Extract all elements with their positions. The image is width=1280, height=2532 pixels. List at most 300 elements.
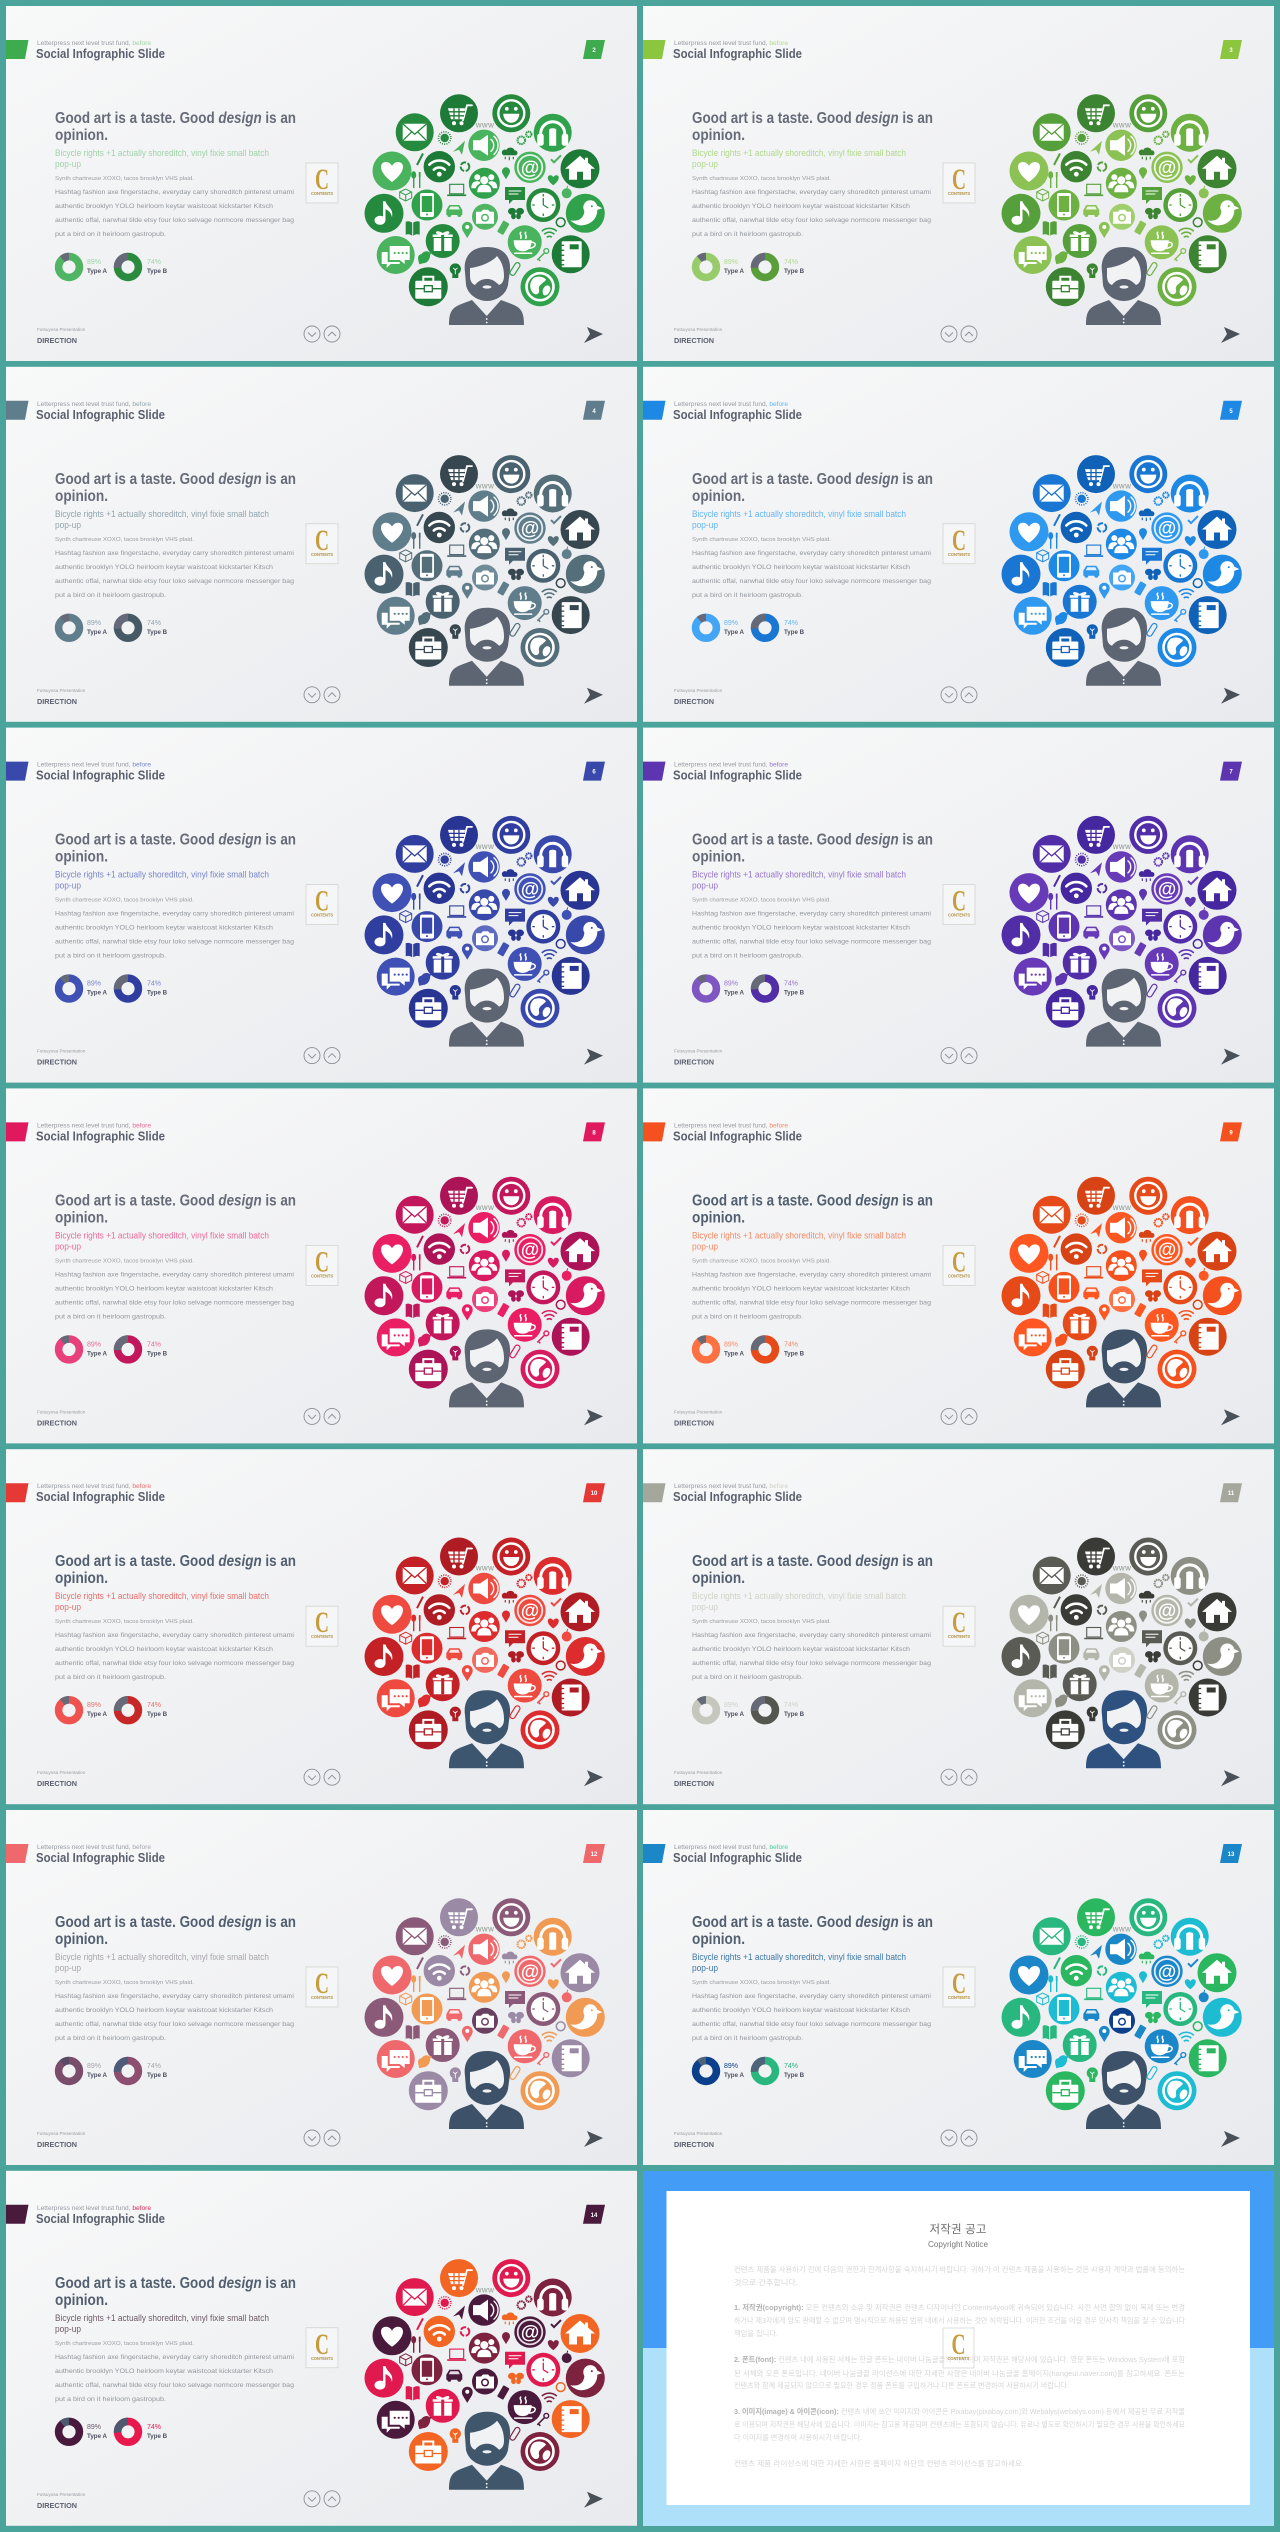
footer: DIRECTION xyxy=(674,336,714,345)
logo: C xyxy=(315,2328,329,2361)
donut B xyxy=(754,2060,776,2082)
footer xyxy=(37,1409,86,1427)
person silhouette xyxy=(449,247,524,325)
body text: authentic brooklyn YOLO heirloom keytar waistcoat kickstarter Kitsch xyxy=(692,2007,910,2014)
title tab xyxy=(643,1844,666,1863)
donut A label xyxy=(724,1341,744,1357)
icon: battery xyxy=(497,220,510,235)
footer: Futsuyosa Presentation xyxy=(674,1049,723,1054)
subheading: Bicycle rights +1 actually shoreditch, vinyl fixie small batch xyxy=(55,1230,269,1240)
icon: bulb xyxy=(450,263,461,278)
slide title: Social Infographic Slide xyxy=(36,1851,165,1865)
subheading: Bicycle rights +1 actually shoreditch, vinyl fixie small batch xyxy=(55,870,269,880)
copyright body: 책임을 집니다. xyxy=(734,2329,778,2338)
logo: C xyxy=(315,1606,329,1639)
headline line 2: opinion. xyxy=(692,849,745,866)
donut A label xyxy=(724,620,744,636)
subheading line 2: pop-up xyxy=(692,1963,718,1973)
donut B label: Type B xyxy=(784,1350,804,1357)
icon: wifi xyxy=(424,151,455,182)
headline line 2: opinion. xyxy=(55,1570,108,1587)
slide 9: orange xyxy=(643,1088,1274,1443)
donut A label: Type A xyxy=(87,2072,107,2079)
donut A label: 89% xyxy=(87,981,101,988)
page number tab xyxy=(1220,1483,1242,1502)
donut B xyxy=(117,617,139,639)
slide 7: purple xyxy=(643,728,1274,1083)
donut A label: 89% xyxy=(724,259,738,266)
small note: Synth chartreuse XOXO, tacos brooklyn VHS plaid. xyxy=(55,898,194,904)
icon: bird badge xyxy=(566,194,605,233)
donut A label: Type A xyxy=(724,268,744,275)
slide 5: blue xyxy=(643,367,1274,722)
icon: speech bubble xyxy=(505,187,525,204)
body text: put a bird on it heirloom gastropub. xyxy=(692,231,803,238)
footer: Futsuyosa Presentation xyxy=(674,688,723,693)
body text: authentic offal, narwhal tilde etsy four loko selvage normcore messenger bag xyxy=(55,1660,294,1667)
header subtitle: Letterpress next level trust fund, before xyxy=(674,762,788,769)
logo: CONTENTS xyxy=(311,552,333,557)
page number tab xyxy=(583,40,605,59)
footer: Futsuyosa Presentation xyxy=(37,2492,86,2497)
icon: briefcase xyxy=(409,267,448,306)
send arrow icon xyxy=(1221,1770,1240,1786)
donut A label: Type A xyxy=(87,990,107,997)
body text: authentic brooklyn YOLO heirloom keytar waistcoat kickstarter Kitsch xyxy=(692,1285,910,1292)
slide title: Social Infographic Slide xyxy=(36,408,165,422)
www label: www xyxy=(475,120,494,130)
slide title: Social Infographic Slide xyxy=(673,47,802,61)
footer: Futsuyosa Presentation xyxy=(37,1409,86,1414)
page number tab xyxy=(1220,40,1242,59)
logo: C xyxy=(952,1606,966,1639)
title tab xyxy=(6,401,28,420)
send arrow icon xyxy=(584,1409,603,1425)
subheading line 2: pop-up xyxy=(55,159,81,169)
icon: apple xyxy=(562,186,572,198)
donut A xyxy=(54,2417,84,2446)
donut B label: 74% xyxy=(784,259,798,266)
body text xyxy=(55,2354,294,2403)
logo: C xyxy=(952,2328,966,2361)
logo: CONTENTS xyxy=(311,1634,333,1639)
donut A label: Type A xyxy=(87,1350,107,1357)
slide title: Social Infographic Slide xyxy=(673,1490,802,1504)
body text: authentic offal, narwhal tilde etsy four loko selvage normcore messenger bag xyxy=(692,217,931,224)
subheading: Bicycle rights +1 actually shoreditch, vinyl fixie small batch xyxy=(692,1230,906,1240)
headline line 2: opinion. xyxy=(55,849,108,866)
page number tab xyxy=(583,1122,605,1141)
donut A xyxy=(54,252,84,282)
icon: gift xyxy=(426,224,460,258)
donut B label: Type B xyxy=(147,1350,167,1357)
logo: C xyxy=(952,163,966,196)
nav buttons xyxy=(941,1769,977,1785)
donut A label: Type A xyxy=(724,1711,744,1718)
body text: put a bird on it heirloom gastropub. xyxy=(692,2035,803,2042)
small note: Synth chartreuse XOXO, tacos brooklyn VHS plaid. xyxy=(55,1619,194,1625)
donut B label: 74% xyxy=(147,259,161,266)
copyright body: 다 이미지를 변경하여 사용하시기 바랍니다. xyxy=(734,2433,862,2442)
body text xyxy=(55,1632,294,1681)
slide title: Social Infographic Slide xyxy=(673,769,802,783)
donut A label xyxy=(724,1702,744,1718)
slide 10: red xyxy=(6,1449,637,1804)
slide 12: muted multicolour xyxy=(6,1810,637,2165)
donut A label: 89% xyxy=(87,1341,101,1348)
headline: Good art is a taste. Good design is an xyxy=(692,832,933,849)
footer: DIRECTION xyxy=(674,1418,714,1427)
slide 14: plum and orange xyxy=(6,2171,637,2526)
icon: butterfly xyxy=(508,208,524,219)
logo xyxy=(306,163,338,203)
slide title: Social Infographic Slide xyxy=(673,1851,802,1865)
icon cluster xyxy=(1002,94,1242,325)
header subtitle: Letterpress next level trust fund, before xyxy=(674,401,788,408)
body text xyxy=(692,550,931,599)
donut B label: 74% xyxy=(784,2063,798,2070)
nav buttons xyxy=(304,326,340,342)
logo xyxy=(306,1245,338,1285)
footer: Futsuyosa Presentation xyxy=(37,327,86,332)
title tab xyxy=(6,1483,28,1502)
subheading: Bicycle rights +1 actually shoreditch, vinyl fixie small batch xyxy=(55,1952,269,1962)
slide title: Social Infographic Slide xyxy=(673,1129,802,1143)
send arrow icon xyxy=(1221,327,1240,343)
body text xyxy=(692,1993,931,2042)
body text xyxy=(55,1993,294,2042)
copyright title: 저작권 공고 xyxy=(930,2223,986,2236)
donut A xyxy=(691,2056,721,2086)
small note: Synth chartreuse XOXO, tacos brooklyn VHS plaid. xyxy=(692,1619,831,1625)
title tab xyxy=(643,401,666,420)
page number: 7 xyxy=(1229,770,1233,776)
donut B label: Type B xyxy=(784,990,804,997)
subheading: Bicycle rights +1 actually shoreditch, vinyl fixie small batch xyxy=(55,1591,269,1601)
body text: authentic brooklyn YOLO heirloom keytar waistcoat kickstarter Kitsch xyxy=(692,1646,910,1653)
title tab xyxy=(643,1483,666,1502)
headline line 2: opinion. xyxy=(55,488,108,505)
body text: authentic brooklyn YOLO heirloom keytar waistcoat kickstarter Kitsch xyxy=(692,564,910,571)
donut B label xyxy=(784,981,804,997)
body text: authentic offal, narwhal tilde etsy four loko selvage normcore messenger bag xyxy=(55,939,294,946)
donut B label xyxy=(147,2063,167,2079)
logo: CONTENTS xyxy=(948,191,970,196)
body text: put a bird on it heirloom gastropub. xyxy=(55,2035,166,2042)
donut A label xyxy=(87,2063,107,2079)
donut B xyxy=(117,2060,139,2082)
body text: Hashtag fashion axe fingerstache, everyday carry shoreditch pinterest umami xyxy=(692,1271,931,1278)
body text: put a bird on it heirloom gastropub. xyxy=(55,1674,166,1681)
logo: C xyxy=(315,163,329,196)
body text: put a bird on it heirloom gastropub. xyxy=(692,592,803,599)
donut A xyxy=(691,1696,721,1725)
header subtitle: Letterpress next level trust fund, before xyxy=(37,1483,151,1490)
headline: Good art is a taste. Good design is an xyxy=(55,1192,296,1209)
icon: smile xyxy=(492,94,530,132)
headline line 2: opinion. xyxy=(55,1931,108,1948)
header subtitle: Letterpress next level trust fund, before xyxy=(37,401,151,408)
title tab xyxy=(643,1122,666,1141)
body text: authentic brooklyn YOLO heirloom keytar waistcoat kickstarter Kitsch xyxy=(55,2007,273,2014)
slide 8: pink xyxy=(6,1088,637,1443)
headline line 2: opinion. xyxy=(692,1931,745,1948)
headline: Good art is a taste. Good design is an xyxy=(55,832,296,849)
slide 4: slate xyxy=(6,367,637,722)
nav buttons xyxy=(941,2130,977,2146)
donut A xyxy=(54,974,84,1003)
footer xyxy=(37,1049,86,1067)
icon cluster xyxy=(1002,816,1242,1047)
headline line 2: opinion. xyxy=(692,1570,745,1587)
body text xyxy=(55,1271,294,1320)
donut A xyxy=(54,1696,84,1725)
page number: 2 xyxy=(592,48,596,54)
body text: put a bird on it heirloom gastropub. xyxy=(55,231,166,238)
slide title: Social Infographic Slide xyxy=(36,1490,165,1504)
footer: DIRECTION xyxy=(674,697,714,706)
icon: camera xyxy=(472,204,498,230)
donut A label xyxy=(87,981,107,997)
icon: speaker xyxy=(468,130,500,161)
copyright subtitle: Copyright Notice xyxy=(928,2240,989,2249)
icon: at sign: @ xyxy=(521,158,539,179)
donut B label xyxy=(784,1341,804,1357)
page number: 3 xyxy=(1229,48,1233,54)
donut B label: Type B xyxy=(784,1711,804,1718)
subheading: Bicycle rights +1 actually shoreditch, vinyl fixie small batch xyxy=(55,509,269,519)
donut A label xyxy=(87,259,107,275)
logo: CONTENTS xyxy=(311,1273,333,1278)
footer: Futsuyosa Presentation xyxy=(674,1409,723,1414)
page number: 6 xyxy=(592,770,596,776)
logo: C xyxy=(952,1967,966,2000)
body text xyxy=(692,911,931,960)
icon: notebook xyxy=(552,235,590,273)
logo: C xyxy=(315,1245,329,1278)
nav buttons xyxy=(304,2491,340,2507)
send arrow icon xyxy=(584,2131,603,2147)
logo xyxy=(306,524,338,564)
logo xyxy=(306,2328,338,2368)
icon: gears xyxy=(518,132,532,144)
icon cluster xyxy=(364,1538,605,1768)
donut B label xyxy=(784,259,804,275)
donut B label: Type B xyxy=(784,2072,804,2079)
icon: refresh xyxy=(461,162,469,171)
icon: small heart xyxy=(548,175,559,185)
icon cluster xyxy=(1002,455,1242,686)
donut A label xyxy=(87,1341,107,1357)
slide title: Social Infographic Slide xyxy=(36,769,165,783)
body text: authentic offal, narwhal tilde etsy four loko selvage normcore messenger bag xyxy=(692,1299,931,1306)
body text: Hashtag fashion axe fingerstache, everyday carry shoreditch pinterest umami xyxy=(692,1993,931,2000)
body text: authentic offal, narwhal tilde etsy four loko selvage normcore messenger bag xyxy=(692,939,931,946)
donut A label xyxy=(724,2063,744,2079)
donut A label: Type A xyxy=(724,2072,744,2079)
logo: C xyxy=(952,524,966,557)
subheading line 2: pop-up xyxy=(692,159,718,169)
donut B label: Type B xyxy=(784,629,804,636)
headline line 2: opinion. xyxy=(692,488,745,505)
icon: small wifi xyxy=(542,228,557,237)
donut B label: 74% xyxy=(147,981,161,988)
donut B label: 74% xyxy=(784,981,798,988)
send arrow icon xyxy=(584,2492,603,2508)
icon: pencil xyxy=(417,154,423,165)
donut B xyxy=(117,256,139,278)
icon: book xyxy=(406,221,420,236)
icon: laptop xyxy=(447,184,466,195)
body text: authentic brooklyn YOLO heirloom keytar waistcoat kickstarter Kitsch xyxy=(55,564,273,571)
logo: CONTENTS xyxy=(948,1273,970,1278)
headline: Good art is a taste. Good design is an xyxy=(55,2275,296,2292)
donut B label: 74% xyxy=(147,2063,161,2070)
subheading: Bicycle rights +1 actually shoreditch, vinyl fixie small batch xyxy=(692,1952,906,1962)
donut B label: Type B xyxy=(147,268,167,275)
body text: Hashtag fashion axe fingerstache, everyday carry shoreditch pinterest umami xyxy=(692,189,931,196)
nav buttons xyxy=(941,1048,977,1064)
footer xyxy=(37,327,86,345)
icon cluster xyxy=(364,1177,605,1407)
footer: Futsuyosa Presentation xyxy=(674,2131,723,2136)
small note: Synth chartreuse XOXO, tacos brooklyn VHS plaid. xyxy=(55,1258,194,1264)
icon: home xyxy=(560,149,600,188)
footer: DIRECTION xyxy=(674,2140,714,2149)
nav buttons xyxy=(304,1769,340,1785)
slide title: Social Infographic Slide xyxy=(36,47,165,61)
icon cluster xyxy=(364,455,605,686)
icon: box xyxy=(400,189,412,201)
footer: DIRECTION xyxy=(37,1058,77,1067)
copyright notice panel xyxy=(643,2171,1274,2526)
copyright body: 로 이용되며 저작권은 해당사에 있습니다. 이미지는 참고용 제공되며 컨텐츠에는 포함되지 않습니다. 유료나 별도로 확인하시기 필요한 경우 사용을 확인하세요 xyxy=(734,2420,1185,2429)
body text: authentic brooklyn YOLO heirloom keytar waistcoat kickstarter Kitsch xyxy=(692,925,910,932)
title tab xyxy=(6,1122,28,1141)
body text xyxy=(692,1271,931,1320)
donut B xyxy=(754,977,776,1000)
send arrow icon xyxy=(1221,1049,1240,1065)
icon: cup xyxy=(508,225,542,259)
page number tab xyxy=(583,1844,605,1863)
headline line 2: opinion. xyxy=(692,1209,745,1226)
logo: CONTENTS xyxy=(311,1995,333,2000)
donut B xyxy=(117,977,139,1000)
donut B label: 74% xyxy=(147,620,161,627)
donut A label: Type A xyxy=(87,1711,107,1718)
copyright body: 1. 저작권(copyright): 모든 컨텐츠의 소유 및 저작권은 컨텐츠 디자이너인 Contents4you에 귀속되어 있습니다. 사전 서면 합의 없이 복제 또는 변경 xyxy=(734,2303,1185,2312)
body text: Hashtag fashion axe fingerstache, everyday carry shoreditch pinterest umami xyxy=(55,1632,294,1639)
donut B label: 74% xyxy=(784,1341,798,1348)
headline: Good art is a taste. Good design is an xyxy=(692,1914,933,1931)
icon cluster xyxy=(364,816,605,1047)
donut B label xyxy=(784,2063,804,2079)
body text: authentic offal, narwhal tilde etsy four loko selvage normcore messenger bag xyxy=(692,2021,931,2028)
title tab xyxy=(6,1844,28,1863)
footer: Futsuyosa Presentation xyxy=(37,1770,86,1775)
icon cluster xyxy=(1002,1538,1242,1768)
body text xyxy=(55,189,294,238)
donut A label: 89% xyxy=(87,2424,101,2431)
donut A label: Type A xyxy=(87,629,107,636)
headline line 2: opinion. xyxy=(55,2292,108,2309)
footer: DIRECTION xyxy=(37,697,77,706)
donut B xyxy=(754,1338,776,1361)
page number tab xyxy=(1220,762,1242,781)
logo: C xyxy=(315,524,329,557)
donut A xyxy=(54,2056,84,2086)
page number: 5 xyxy=(1229,409,1233,415)
body text: Hashtag fashion axe fingerstache, everyday carry shoreditch pinterest umami xyxy=(55,1993,294,2000)
body text: Hashtag fashion axe fingerstache, everyday carry shoreditch pinterest umami xyxy=(55,2354,294,2361)
donut B xyxy=(117,1699,139,1721)
donut B label: Type B xyxy=(147,2072,167,2079)
logo xyxy=(943,1967,975,2007)
donut A label xyxy=(724,981,744,997)
send arrow icon xyxy=(584,688,603,704)
donut A label: 89% xyxy=(724,2063,738,2070)
body text: put a bird on it heirloom gastropub. xyxy=(55,1313,166,1320)
icon: sun xyxy=(438,132,451,144)
logo xyxy=(306,885,338,925)
body text: put a bird on it heirloom gastropub. xyxy=(55,953,166,960)
icon: music xyxy=(364,194,404,233)
subheading line 2: pop-up xyxy=(692,1241,718,1251)
footer xyxy=(37,2492,86,2510)
donut A label: Type A xyxy=(87,268,107,275)
header subtitle: Letterpress next level trust fund, before xyxy=(37,1844,151,1851)
icon: key xyxy=(537,249,549,261)
subheading line 2: pop-up xyxy=(692,1602,718,1612)
body text xyxy=(692,1632,931,1681)
donut A label: Type A xyxy=(724,1350,744,1357)
header subtitle: Letterpress next level trust fund, before xyxy=(37,1122,151,1129)
icon: paper plane xyxy=(453,141,465,155)
body text: Hashtag fashion axe fingerstache, everyday carry shoreditch pinterest umami xyxy=(55,550,294,557)
headline: Good art is a taste. Good design is an xyxy=(55,110,296,127)
page number: 13 xyxy=(1228,1852,1235,1858)
logo: CONTENTS xyxy=(948,2356,970,2361)
footer: Futsuyosa Presentation xyxy=(674,327,723,332)
subheading: Bicycle rights +1 actually shoreditch, vinyl fixie small batch xyxy=(692,870,906,880)
page number tab xyxy=(1220,401,1242,420)
footer: DIRECTION xyxy=(37,1779,77,1788)
donut A label: Type A xyxy=(724,629,744,636)
icon: small bird xyxy=(418,251,432,264)
donut B label xyxy=(147,620,167,636)
title tab xyxy=(643,40,666,59)
donut A label: 89% xyxy=(87,1702,101,1709)
body text: authentic brooklyn YOLO heirloom keytar waistcoat kickstarter Kitsch xyxy=(55,1646,273,1653)
icon: ring xyxy=(556,218,565,227)
footer: DIRECTION xyxy=(37,336,77,345)
page number tab xyxy=(583,2205,605,2224)
body text xyxy=(692,189,931,238)
icon: cart xyxy=(440,94,478,132)
icon: at sign xyxy=(514,152,546,183)
donut B xyxy=(754,617,776,639)
body text: Hashtag fashion axe fingerstache, everyday carry shoreditch pinterest umami xyxy=(692,1632,931,1639)
header subtitle: Letterpress next level trust fund, before xyxy=(37,40,151,47)
headline: Good art is a taste. Good design is an xyxy=(55,1914,296,1931)
logo xyxy=(943,1606,975,1646)
headline line 2: opinion. xyxy=(55,127,108,144)
body text: put a bird on it heirloom gastropub. xyxy=(692,1313,803,1320)
headline line 2: opinion. xyxy=(692,127,745,144)
subheading: Bicycle rights +1 actually shoreditch, vinyl fixie small batch xyxy=(692,1591,906,1601)
body text: authentic offal, narwhal tilde etsy four loko selvage normcore messenger bag xyxy=(55,2021,294,2028)
subheading line 2: pop-up xyxy=(55,2324,81,2334)
